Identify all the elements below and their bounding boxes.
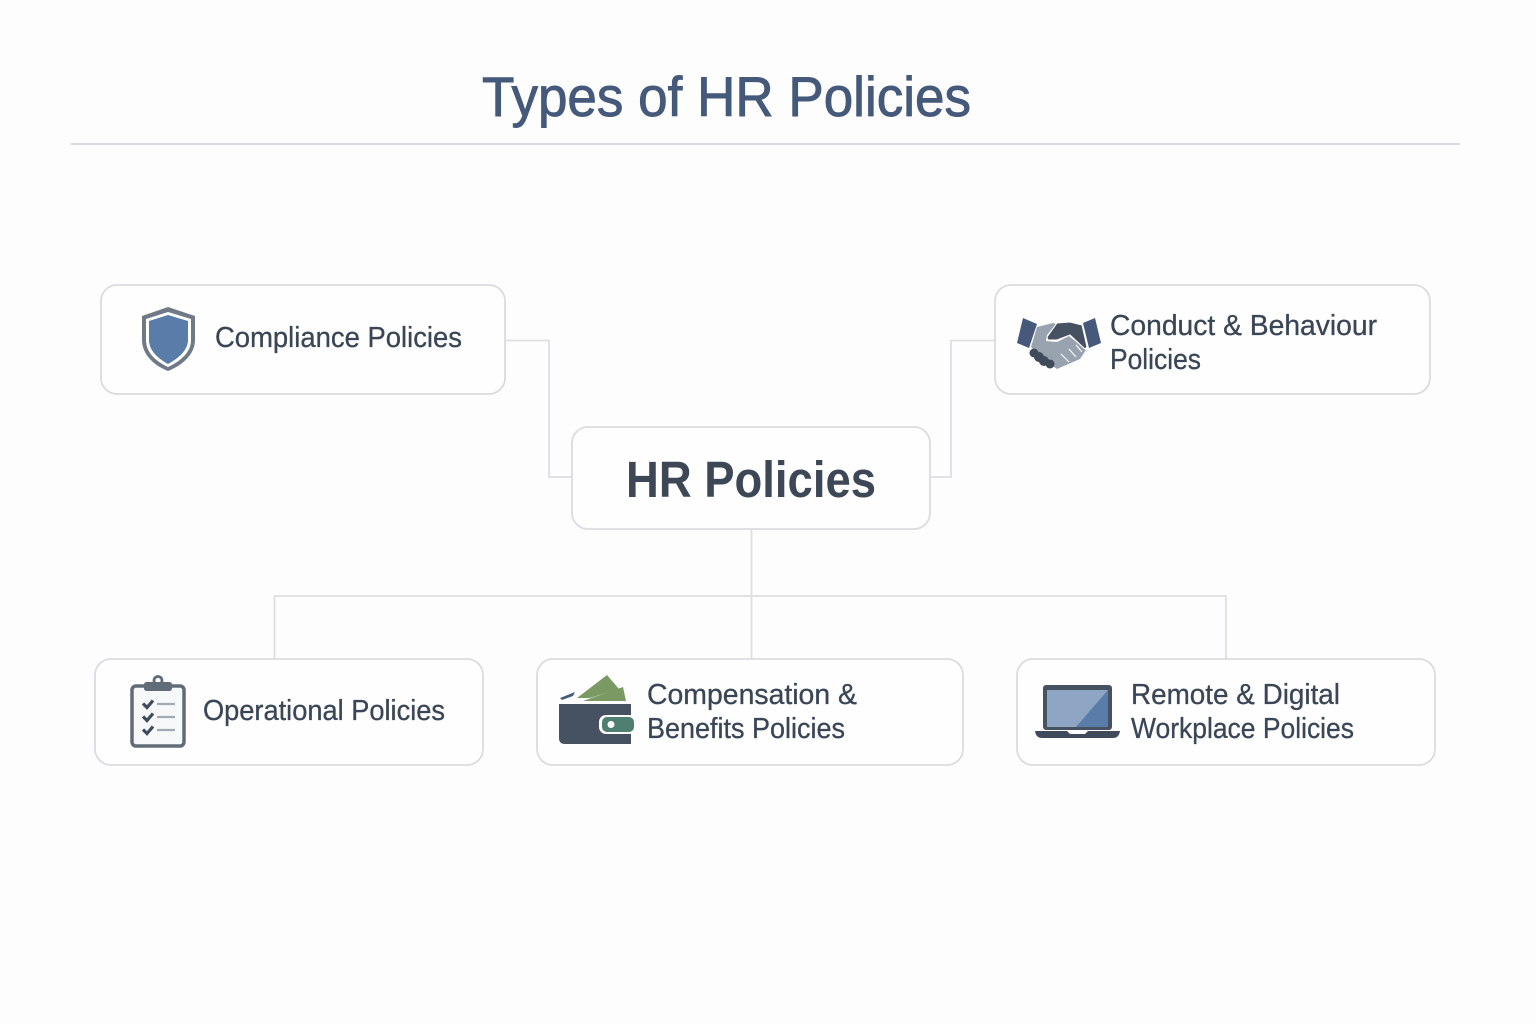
label: Compliance Policies — [215, 322, 462, 354]
label: Operational Policies — [203, 695, 445, 727]
panel: compensation and benefits policies: Benefits Policies — [647, 713, 845, 745]
icon: shield — [142, 307, 195, 371]
panel: compliance policies — [101, 285, 505, 394]
icon: laptop — [1035, 685, 1120, 738]
icon: wallet with cash — [559, 675, 636, 744]
icon: clipboard — [132, 676, 184, 746]
label: Remote & Digital — [1131, 679, 1340, 711]
centre label: HR Policies — [626, 451, 876, 508]
panel: centre node — [572, 427, 930, 529]
label: Conduct & Behaviour — [1110, 310, 1377, 342]
panel: remote and digital workplace policies — [1017, 659, 1435, 765]
connector: conduct to centre — [930, 340, 995, 477]
connector: centre to bottom row — [274, 529, 1226, 659]
panel: conduct and behaviour policies — [995, 285, 1430, 394]
connector: compliance to centre — [505, 340, 572, 477]
panel: remote and digital workplace policies: Workplace Policies — [1131, 713, 1354, 745]
title: Types of HR Policies — [482, 65, 971, 128]
icon: handshake — [1017, 318, 1101, 369]
panel: compensation and benefits policies — [537, 659, 963, 765]
panel: operational policies — [95, 659, 483, 765]
label: Compensation & — [647, 679, 857, 711]
panel: conduct and behaviour policies: Policies — [1110, 344, 1201, 376]
